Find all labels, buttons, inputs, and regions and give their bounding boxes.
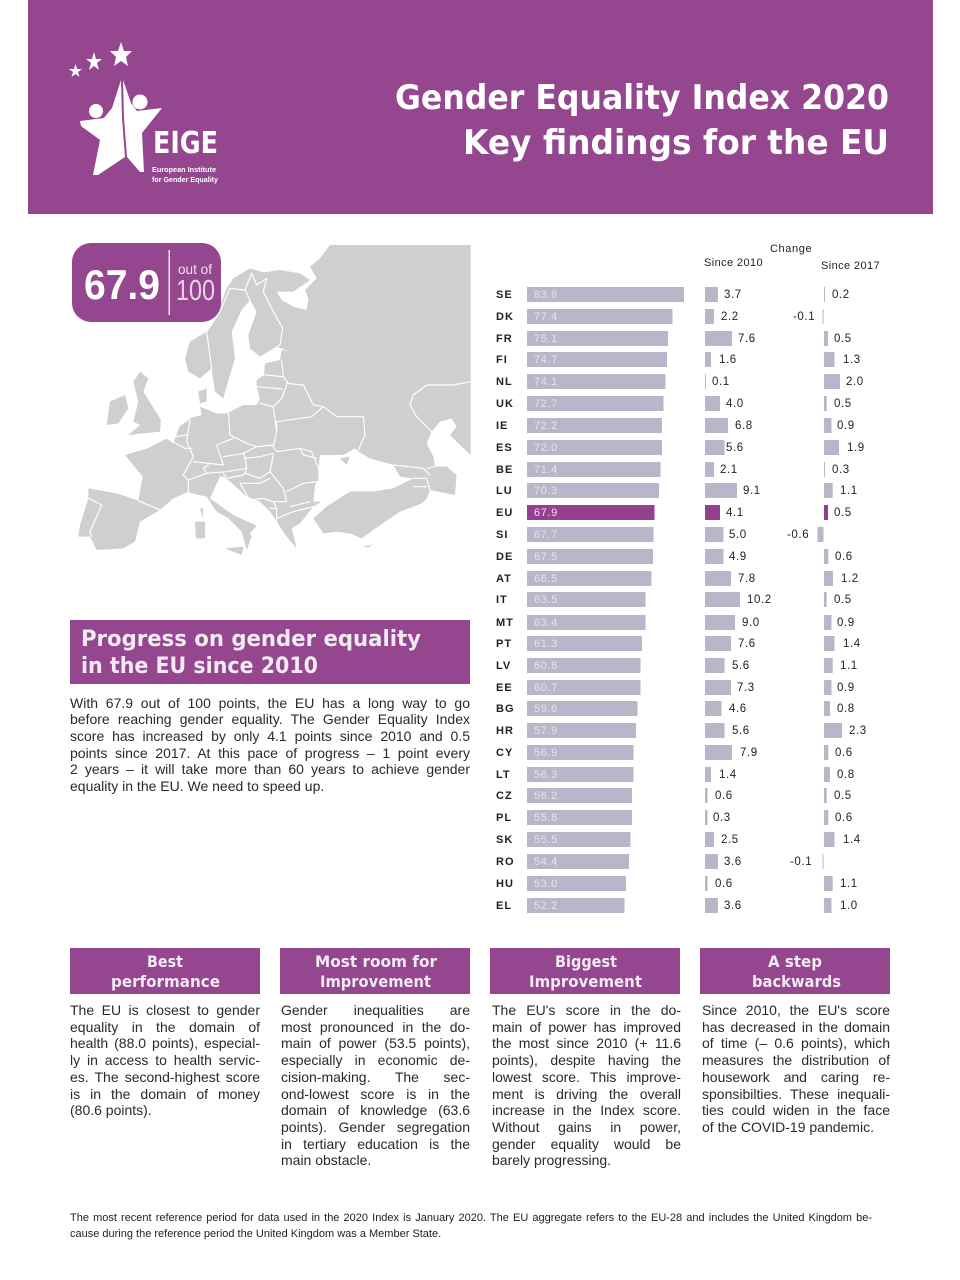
row CY: 0.6 [835,747,853,759]
row SI: 5.0 [729,529,747,541]
row LT: LT [496,769,511,781]
panel heading: Biggest [555,952,617,971]
row FI: 1.3 [843,354,861,366]
row BE: 71.4 [534,464,558,476]
panel text: Since 2010, the EU's score [702,1002,890,1018]
row UK [496,396,852,411]
row IT: IT [496,594,508,606]
panel text: cision-making. The sec- [281,1069,470,1085]
intro text [70,695,470,794]
row BG: 4.6 [729,703,747,715]
panel text: Gender inequalities are [281,1002,470,1018]
panel text: main obstacle. [281,1152,371,1168]
panel text: of time (– 0.6 points), which [702,1035,890,1051]
row SE [496,287,850,302]
row PT [496,636,861,651]
intro text: 2 years – it will take more than 60 years to achieve gender [70,761,470,777]
logo subtitle: European Institute [152,167,216,174]
row LU: 70.3 [534,485,558,497]
row DK: -0.1 [793,311,815,323]
row SI: SI [496,529,508,541]
row HR [496,723,867,738]
panel text: in tertiary education is the [281,1136,470,1152]
intro text: points since 2017. At this pace of progress – 1 point every [70,745,470,761]
row DK: 2.2 [721,311,739,323]
row IT [496,592,852,607]
row EE: 0.9 [837,682,855,694]
map of Europe [78,245,471,555]
panel: biggest improvement [490,948,681,1168]
row IE: IE [496,420,508,432]
row ES: 5.6 [726,442,744,454]
row AT: 66.5 [534,573,558,585]
panel text: points), despite having the [492,1052,681,1068]
row CY [496,745,853,760]
row LV: 1.1 [840,660,858,672]
panel text [281,1002,470,1168]
row RO: 3.6 [724,856,742,868]
row PL [496,810,853,825]
row BE: 0.3 [832,464,850,476]
footnote: The most recent reference period for data used in the 2020 Index is January 2020. The EU aggregate refers to the EU-28 and includes the United Kingdom be- [70,1212,872,1224]
row HR: HR [496,725,514,737]
row MT: 63.4 [534,617,558,629]
chart column headings: Change [770,243,812,255]
heading: progress on gender equality [70,620,470,684]
chart: country scores and change [496,243,880,913]
panel: best performance [70,948,260,1118]
chart column headings: Since 2017 [821,260,880,272]
row LT [496,767,855,782]
score badge [72,243,221,322]
panel heading [490,948,680,994]
panel heading: A step [768,952,822,971]
row EL: 3.6 [724,900,742,912]
panel text: lowest score. This improve- [492,1069,681,1085]
panel text: increase in the Index score. [492,1102,681,1118]
row NL: NL [496,376,513,388]
row EL: EL [496,900,512,912]
panel text: The EU is closest to gender [70,1002,260,1018]
panel: a step backwards [700,948,890,1135]
panel text: ties could widen in the face [702,1102,890,1118]
row DE: 0.6 [835,551,853,563]
row RO: RO [496,856,514,868]
row UK: 0.5 [834,398,852,410]
row CZ: 56.2 [534,790,558,802]
row ES: 1.9 [847,442,865,454]
row RO: 54.4 [534,856,558,868]
panel text [492,1002,681,1168]
row BG: BG [496,703,514,715]
panel text: the most since 2010 (+ 11.6 [492,1035,681,1051]
panel text: (80.6 points). [70,1102,152,1118]
panel text: ond-lowest score is in the [281,1086,470,1102]
row LU: LU [496,485,513,497]
row SK: 1.4 [843,834,861,846]
icon: star figures [80,80,162,175]
row PT: 7.6 [738,638,756,650]
row IE: 0.9 [837,420,855,432]
row EE [496,680,855,695]
row LT: 56.3 [534,769,558,781]
row DK [496,309,824,324]
row SI [496,527,824,542]
title: Gender Equality Index 2020 [395,78,889,118]
row MT: MT [496,617,514,629]
row PL: 0.3 [713,812,731,824]
icon: three stars [69,42,132,77]
row FI [496,352,861,367]
panel heading: Most room for [315,952,437,971]
row MT: 9.0 [742,617,760,629]
row AT: 1.2 [841,573,859,585]
logo subtitle: for Gender Equality [152,177,218,184]
row EU: 0.5 [834,507,852,519]
logo: EIGE [69,42,218,184]
row MT: 0.9 [837,617,855,629]
row IE [496,418,855,433]
row BG: 59.6 [534,703,558,715]
row LU: 1.1 [840,485,858,497]
panel: most room for improvement [280,948,470,1168]
row LV: LV [496,660,511,672]
row ES: 72.0 [534,442,558,454]
row PL: 55.8 [534,812,558,824]
row EE: EE [496,682,513,694]
intro text: score has increased by only 4.1 points since 2010 and 0.5 [70,728,470,744]
row FR: FR [496,333,513,345]
row EL: 1.0 [840,900,858,912]
row DK: DK [496,311,514,323]
row MT [496,615,855,630]
panel heading: Best [147,952,183,971]
row UK: 72.7 [534,398,558,410]
panel text: domain of knowledge (63.6 [281,1102,470,1118]
panel text: main of power has improved [492,1019,681,1035]
row HR: 5.6 [732,725,750,737]
row LU: 9.1 [743,485,761,497]
row DE: 67.5 [534,551,558,563]
panel text: is in the domain of money [70,1086,260,1102]
row IE: 6.8 [735,420,753,432]
header banner [28,0,933,214]
panel text: health (88.0 points), especial- [70,1035,260,1051]
panel text: The EU's score in the do- [492,1002,681,1018]
row NL: 0.1 [712,376,730,388]
title [395,78,889,163]
row BE [496,462,850,477]
row CY: CY [496,747,513,759]
row EU: 67.9 [534,507,558,519]
out of 100: 100 [176,275,215,307]
logo subtitle [152,167,218,184]
row RO: -0.1 [790,856,812,868]
panel heading: Improvement [529,972,642,991]
row PT: 1.4 [843,638,861,650]
panel text: points). Gender segregation [281,1119,470,1135]
score value: 67.9 [84,261,160,308]
row FI: 74.7 [534,354,558,366]
row FR [496,331,852,346]
panel heading [700,948,890,994]
row FR: 7.6 [738,333,756,345]
footnote: cause during the reference period the United Kingdom was a Member State. [70,1228,441,1240]
row PL: 0.6 [835,812,853,824]
panel text: especially in economic de- [281,1052,470,1068]
row SE: 0.2 [832,289,850,301]
panel heading [280,948,470,994]
row DK: 77.4 [534,311,558,323]
panel text: Without gains in power, [492,1119,681,1135]
row HU: HU [496,878,514,890]
row LV [496,658,858,673]
row LV: 5.6 [732,660,750,672]
row CY: 7.9 [740,747,758,759]
panel text: of the COVID-19 pandemic. [702,1119,874,1135]
row HU: 53.0 [534,878,558,890]
row NL: 2.0 [846,376,864,388]
panel text: ly in access to health servic- [70,1052,260,1068]
row ES [496,440,865,455]
row LV: 60.8 [534,660,558,672]
heading: progress on gender equality: Progress on gender equality [81,627,421,652]
row IE: 72.2 [534,420,558,432]
row LT: 1.4 [719,769,737,781]
intro text: before reaching gender equality. The Gender Equality Index [70,711,470,727]
panel heading [70,948,260,994]
panel text: barely progressing. [492,1152,611,1168]
row FI: 1.6 [719,354,737,366]
row AT: 7.8 [738,573,756,585]
intro text: With 67.9 out of 100 points, the EU has a long way to go [70,695,470,711]
row SE: 3.7 [724,289,742,301]
row EU: 4.1 [726,507,744,519]
intro text: equality in the EU. We need to speed up. [70,778,324,794]
row DE: 4.9 [729,551,747,563]
panel text: sponsibilties. These inequali- [702,1086,890,1102]
row NL: 74.1 [534,376,558,388]
panel text: ment is driving the overall [492,1086,681,1102]
row SE: SE [496,289,513,301]
heading: progress on gender equality: in the EU since 2010 [81,654,318,679]
title: Key findings for the EU [463,123,889,163]
panel heading: backwards [752,972,841,991]
row SI: 67.7 [534,529,558,541]
chart column headings [704,243,880,272]
row HR: 57.9 [534,725,558,737]
panel heading: performance [111,972,220,991]
row SE: 83.8 [534,289,558,301]
panel text: equality in the domain of [70,1019,260,1035]
row CY: 56.9 [534,747,558,759]
row HR: 2.3 [849,725,867,737]
row UK: UK [496,398,514,410]
row CZ: 0.6 [715,790,733,802]
row DE [496,549,853,564]
panel text: es. The second-highest score [70,1069,260,1085]
row EU: EU [496,507,513,519]
row ES: ES [496,442,513,454]
row IT: 63.5 [534,594,558,606]
row BG [496,701,855,716]
row SK: 55.5 [534,834,558,846]
row IT: 10.2 [747,594,772,606]
row LT: 0.8 [837,769,855,781]
row FR: 0.5 [834,333,852,345]
panel text: main of power (53.5 points), [281,1035,470,1051]
row HU [496,876,858,891]
row RO [496,854,824,869]
row EE: 7.3 [737,682,755,694]
panel heading: Improvement [320,972,431,991]
row PT: PT [496,638,512,650]
row EL [496,898,858,913]
row EU [496,505,852,520]
row HU: 1.1 [840,878,858,890]
row AT [496,571,859,586]
footnote [70,1212,872,1240]
panel text: measures the distribution of [702,1052,890,1068]
row EE: 60.7 [534,682,558,694]
row DE: DE [496,551,513,563]
row BE: 2.1 [720,464,738,476]
row PL: PL [496,812,512,824]
row NL [496,374,864,389]
row HU: 0.6 [715,878,733,890]
panel text [70,1002,260,1118]
row CZ [496,788,852,803]
panel text: gender equality would be [492,1136,681,1152]
chart column headings: Since 2010 [704,257,763,269]
panel text: housework and caring re- [702,1069,890,1085]
row BE: BE [496,464,513,476]
logo wordmark: EIGE [153,126,218,161]
out of label: out of [178,261,212,277]
row PT: 61.3 [534,638,558,650]
row FI: FI [496,354,508,366]
row LU [496,483,858,498]
panel text: has decreased in the domain [702,1019,890,1035]
row SK: 2.5 [721,834,739,846]
row BG: 0.8 [837,703,855,715]
row SI: -0.6 [787,529,809,541]
row CZ: 0.5 [834,790,852,802]
row SK: SK [496,834,513,846]
row EL: 52.2 [534,900,558,912]
row SK [496,832,861,847]
panel text [702,1002,890,1135]
row IT: 0.5 [834,594,852,606]
panel text: most pronounced in the do- [281,1019,470,1035]
row CZ: CZ [496,790,513,802]
row AT: AT [496,573,512,585]
row UK: 4.0 [726,398,744,410]
row FR: 75.1 [534,333,558,345]
